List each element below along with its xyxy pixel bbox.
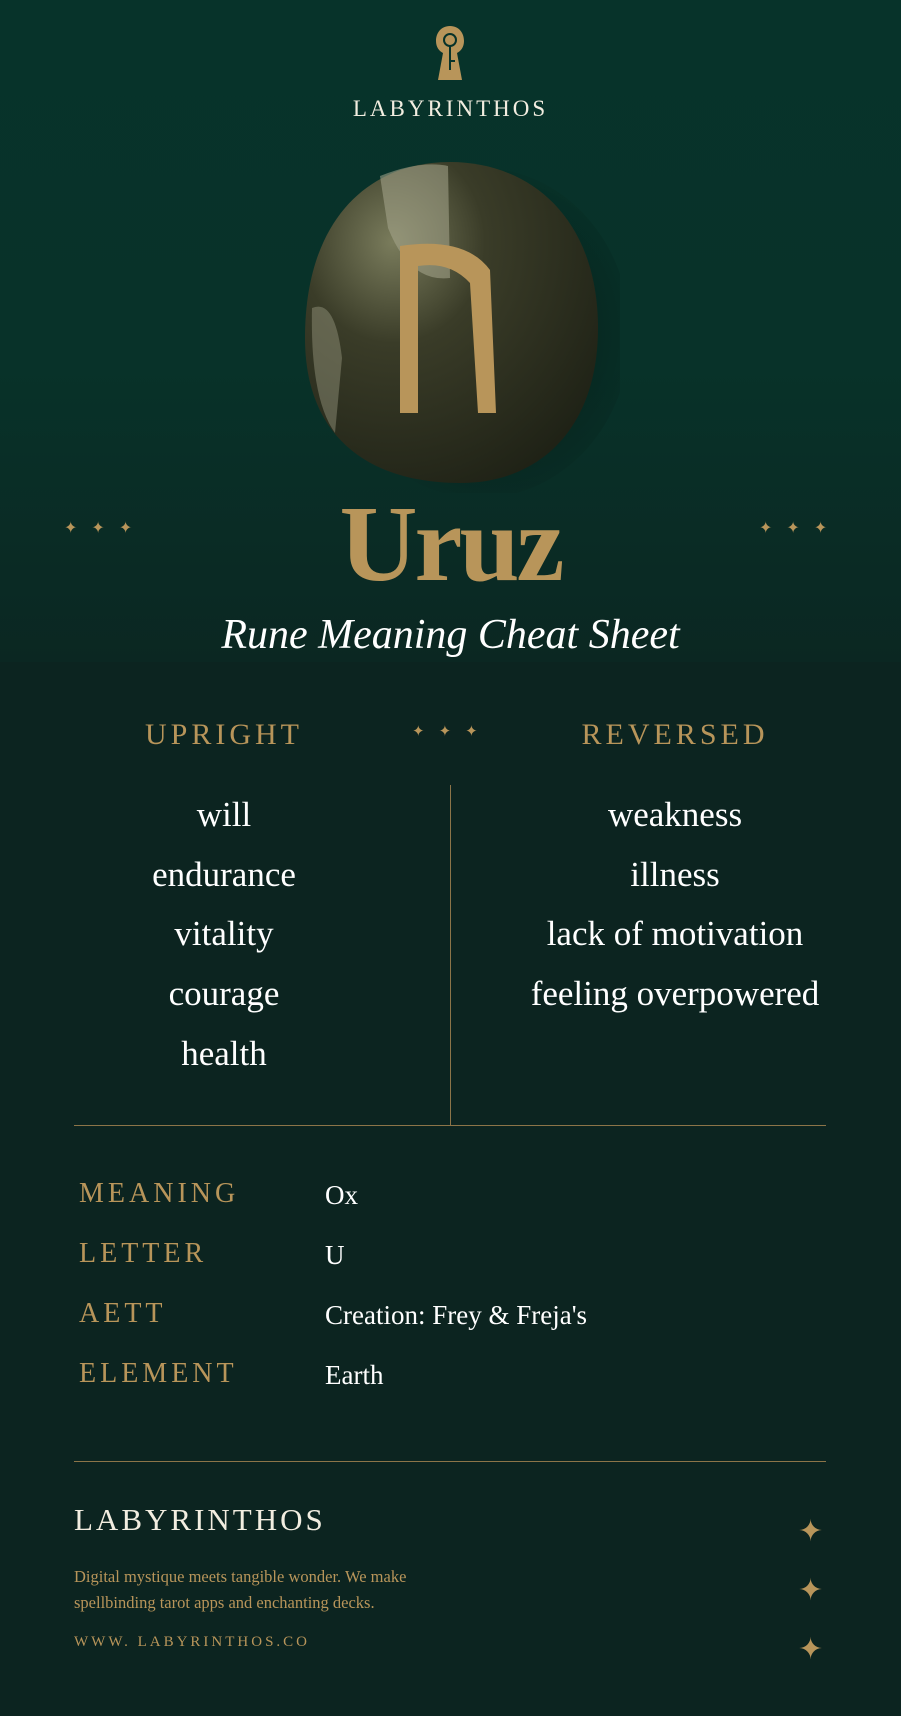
upright list: vitality [174, 914, 274, 953]
footer stars: ✦ [798, 1515, 823, 1548]
footer stars: ✦ [798, 1633, 823, 1666]
facts table: Earth [325, 1360, 383, 1390]
upright list [152, 795, 296, 1073]
vertical divider [450, 785, 451, 1125]
footer stars: ✦ [798, 1574, 823, 1607]
facts table: MEANING [79, 1178, 239, 1209]
heading upright: UPRIGHT [145, 718, 303, 751]
stars right: ✦✦✦ [759, 520, 841, 537]
subtitle: Rune Meaning Cheat Sheet [221, 612, 680, 658]
reversed list [531, 795, 819, 1013]
reversed list: feeling overpowered [531, 974, 819, 1013]
reversed list: weakness [608, 795, 742, 834]
title: Uruz [340, 485, 561, 604]
upright list: endurance [152, 855, 296, 894]
upright list: health [181, 1034, 267, 1073]
footer description: Digital mystique meets tangible wonder. We make spellbinding tarot apps and enchanting decks. [74, 1567, 406, 1612]
upright list: courage [169, 974, 279, 1013]
brand name top: LABYRINTHOS [353, 96, 548, 121]
facts table: LETTER [79, 1238, 207, 1269]
facts table: AETT [79, 1298, 167, 1329]
footer url: WWW. LABYRINTHOS.CO [74, 1634, 310, 1650]
divider [74, 1461, 826, 1462]
footer stars [798, 1515, 823, 1666]
facts table: U [325, 1240, 344, 1270]
stars middle: ✦✦✦ [412, 724, 492, 740]
rune stone [305, 162, 598, 483]
facts table: ELEMENT [79, 1358, 238, 1389]
footer brand: LABYRINTHOS [74, 1502, 326, 1537]
reversed list: illness [630, 855, 720, 894]
reversed list: lack of motivation [547, 914, 803, 953]
facts table: Ox [325, 1180, 358, 1210]
logo: key icon [436, 26, 464, 80]
divider [74, 1125, 826, 1126]
facts table [79, 1178, 587, 1390]
stars left: ✦✦✦ [64, 520, 146, 537]
facts table: Creation: Frey & Freja's [325, 1300, 587, 1330]
heading reversed: REVERSED [581, 718, 768, 751]
upright list: will [197, 795, 251, 834]
